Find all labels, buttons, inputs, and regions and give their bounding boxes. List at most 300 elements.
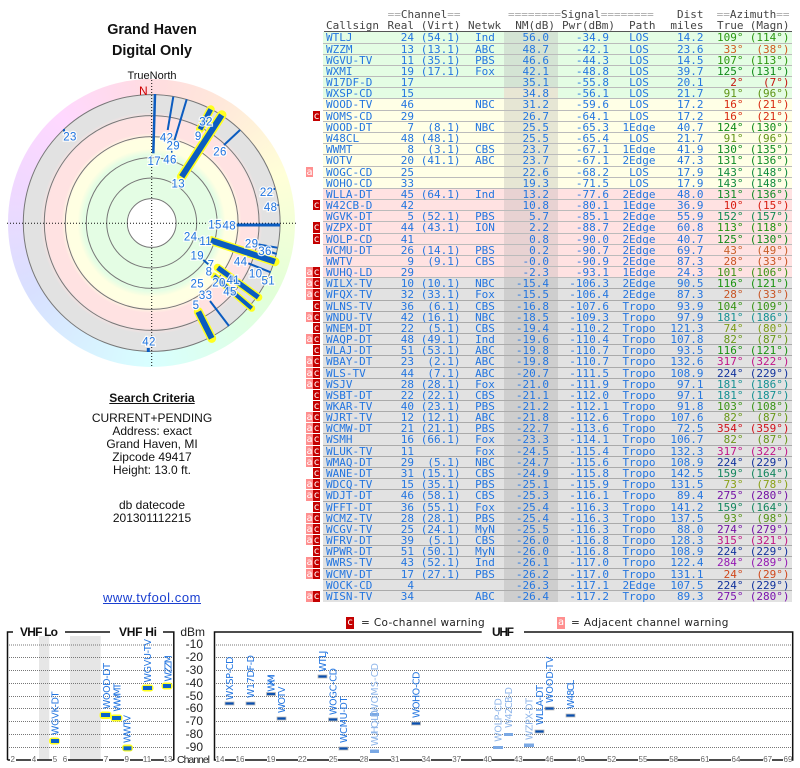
- row WJRT-TV: 12: [401, 411, 414, 424]
- row WGVK-DT: (52.1): [421, 210, 460, 223]
- row WGVU-TV: WGVU-TV: [326, 54, 372, 67]
- VHF stations: WGVU-TV: [143, 638, 154, 682]
- row WOCK-CD: 2Edge: [622, 579, 656, 592]
- row WFFT-DT: (164°): [750, 501, 790, 514]
- row WOOD-TV: 17.2: [677, 98, 704, 111]
- row WJRT-TV: WJRT-TV: [326, 411, 372, 424]
- row WCMV-DT: WCMV-DT: [326, 568, 372, 581]
- row WGVK-DT: (157°): [750, 210, 790, 223]
- UHF channel axis: 52: [607, 755, 617, 764]
- row WGVU-TV: PBS: [475, 54, 495, 67]
- row W17DF-D: 2°: [730, 76, 744, 89]
- dBm scale: -90: [186, 740, 203, 754]
- row W17DF-D: 20.1: [677, 76, 704, 89]
- row WLLA-DT: -77.6: [576, 188, 609, 201]
- table header: (Magn): [750, 19, 790, 32]
- row WANE-DT: (15.1): [421, 467, 460, 480]
- row WWMT: (135°): [750, 143, 790, 156]
- row WGVU-TV: -44.3: [576, 54, 609, 67]
- VHF stations: WWMT: [112, 683, 124, 712]
- row WOMS-CD: 17.2: [677, 110, 704, 123]
- row WFQX-TV: 2Edge: [622, 288, 656, 301]
- row WCGV-TV: 274°: [717, 523, 744, 536]
- UHF channel axis: 19: [267, 755, 276, 764]
- db datecode: db datecode: [119, 498, 185, 512]
- row WCGV-TV: -116.3: [569, 523, 609, 536]
- row WCGV-TV: MyN: [475, 523, 495, 536]
- row WLNS-TV: (109°): [750, 300, 790, 313]
- row W17DF-D: 17: [401, 76, 414, 89]
- row WFFT-DT: -25.4: [516, 501, 549, 514]
- row WUHQ-LD: 1Edge: [622, 266, 656, 279]
- row WDJT-DT: -25.3: [516, 489, 549, 502]
- row WLUK-TV: Tropo: [622, 445, 656, 458]
- station table: c: [313, 434, 320, 445]
- UHF stations: WOLP-CD: [493, 698, 504, 742]
- row WFRV-DT: [323, 535, 792, 546]
- legend: adjacent channel warning: = Adjacent channel warning: [571, 617, 729, 629]
- row WGVK-DT: 152°: [717, 210, 744, 223]
- row WCMZ-TV: -25.4: [516, 512, 549, 525]
- search criteria heading: Search Criteria: [109, 391, 195, 405]
- row WCMW-DT: Tropo: [622, 422, 656, 435]
- row WFRV-DT: (5.1): [427, 534, 460, 547]
- row WSMH: (66.1): [421, 433, 460, 446]
- row WCMU-DT: 43°: [724, 244, 744, 257]
- channel number labels: 29: [245, 238, 258, 250]
- row W42CB-D: (15°): [756, 199, 790, 212]
- row WCMZ-TV: [323, 513, 792, 524]
- row WLAJ-DT: (121°): [750, 344, 790, 357]
- VHF Hi heading: VHF Hi: [119, 625, 157, 639]
- VHF channel axis: 6: [63, 755, 68, 764]
- row WNEM-DT: [323, 323, 792, 334]
- row WCMW-DT: 354°: [717, 422, 744, 435]
- row WLUK-TV: -115.4: [569, 445, 609, 458]
- station table: c: [313, 200, 320, 211]
- website link: www.tvfool.com: [103, 590, 201, 605]
- row WXMI: 19: [401, 65, 414, 78]
- row WNEM-DT: CBS: [475, 322, 495, 335]
- row WLNS-TV: -16.8: [516, 300, 549, 313]
- row WLS-TV: -111.5: [569, 367, 609, 380]
- station table: c: [313, 591, 320, 602]
- row WWMT: 8: [407, 143, 414, 156]
- station table: c: [313, 111, 320, 122]
- row WILX-TV: NBC: [475, 277, 495, 290]
- row WCMW-DT: (359°): [750, 422, 790, 435]
- row WCGV-TV: 25: [401, 523, 414, 536]
- row WOMS-CD: [323, 111, 792, 122]
- row WFFT-DT: 141.2: [670, 501, 704, 514]
- UHF channel axis: 61: [701, 755, 710, 764]
- table header: ==Channel==: [388, 8, 460, 21]
- VHF spectrum chart: [6, 625, 210, 766]
- table header: Callsign: [326, 19, 379, 32]
- row WLLA-DT: 45: [401, 188, 414, 201]
- polar plot: [7, 80, 296, 366]
- row WOOD-TV: LOS: [629, 98, 649, 111]
- row WSBT-DT: 22: [401, 389, 414, 402]
- row WGVK-DT: 55.9: [677, 210, 704, 223]
- UHF channel axis: 58: [669, 755, 679, 764]
- row WILX-TV: WILX-TV: [326, 277, 372, 290]
- row WDCQ-TV: Tropo: [622, 478, 656, 491]
- row WNDU-TV: 42: [401, 311, 414, 324]
- row WZPX-DT: -88.7: [576, 221, 609, 234]
- row WOGC-CD: 22.6: [522, 166, 549, 179]
- row W48CL: 48: [401, 132, 414, 145]
- row WWRS-TV: 122.4: [670, 556, 704, 569]
- row WWTV: -0.0: [522, 255, 549, 268]
- row WSJV: -21.0: [516, 378, 549, 391]
- row WDCQ-TV: [323, 479, 792, 490]
- row WAQP-DT: 107.8: [670, 333, 704, 346]
- row WCMU-DT: (14.1): [421, 244, 460, 257]
- row WFFT-DT: -116.3: [569, 501, 609, 514]
- row WCMZ-TV: WCMZ-TV: [326, 512, 372, 525]
- channel number labels: 42: [160, 132, 173, 144]
- VHF channel axis: 7: [104, 755, 109, 764]
- row WILX-TV: -106.3: [569, 277, 609, 290]
- row WKAR-TV: (108°): [750, 400, 790, 413]
- row WMAQ-DT: 29: [401, 456, 414, 469]
- row WLLA-DT: 48.0: [677, 188, 704, 201]
- row WKAR-TV: WKAR-TV: [326, 400, 372, 413]
- row WAQP-DT: WAQP-DT: [326, 333, 372, 346]
- row WOGC-CD: 17.9: [677, 166, 704, 179]
- row WFRV-DT: CBS: [475, 534, 495, 547]
- row WOTV: 131°: [717, 154, 744, 167]
- row WOLP-CD: -90.0: [576, 233, 609, 246]
- row WJRT-TV: 107.6: [670, 411, 704, 424]
- row WLLA-DT: (136°): [750, 188, 790, 201]
- row WOTV: -67.1: [576, 154, 609, 167]
- row W48CL: [323, 133, 792, 144]
- row WOOD-DT: 124°: [717, 121, 744, 134]
- row WWRS-TV: (52.1): [421, 556, 460, 569]
- row WXMI: (131°): [750, 65, 790, 78]
- row WCMU-DT: WCMU-DT: [326, 244, 372, 257]
- row WTLJ: (114°): [750, 31, 790, 44]
- row WUHQ-LD: -2.3: [522, 266, 549, 279]
- dBm scale: -80: [186, 727, 203, 741]
- row WSBT-DT: WSBT-DT: [326, 389, 372, 402]
- row W17DF-D: LOS: [629, 76, 649, 89]
- table header: (Virt): [421, 19, 460, 32]
- row WSBT-DT: -112.0: [569, 389, 609, 402]
- table header: True: [717, 19, 744, 32]
- row WFRV-DT: (321°): [750, 534, 790, 547]
- dBm scale: -70: [186, 714, 203, 728]
- row WFQX-TV: 32: [401, 288, 414, 301]
- row WSBT-DT: (187°): [750, 389, 790, 402]
- row WBAY-DT: [323, 356, 792, 368]
- row WNEM-DT: 121.3: [670, 322, 704, 335]
- row WFFT-DT: 159°: [717, 501, 744, 514]
- station table: c: [313, 334, 320, 345]
- row WSMH: (87°): [756, 433, 790, 446]
- row WMAQ-DT: NBC: [475, 456, 495, 469]
- row WLUK-TV: 11: [401, 445, 414, 458]
- UHF channel axis: 55: [639, 755, 648, 764]
- row W42CB-D: W42CB-D: [326, 199, 372, 212]
- row WZZM: (38°): [756, 43, 790, 56]
- row WCMW-DT: -113.6: [569, 422, 609, 435]
- station table: [306, 8, 792, 603]
- row WOOD-TV: [323, 99, 792, 111]
- row WCMU-DT: -90.7: [576, 244, 609, 257]
- search criteria details: Grand Haven, MI: [106, 437, 198, 451]
- row WXMI: (17.1): [421, 65, 460, 78]
- row WCMU-DT: 0.2: [529, 244, 549, 257]
- row WCGV-TV: (24.1): [421, 523, 460, 536]
- row WWMT: 23.7: [522, 143, 549, 156]
- row WLLA-DT: 2Edge: [622, 188, 656, 201]
- dBm scale: -40: [186, 676, 203, 690]
- channel axis title: Channel: [177, 754, 210, 766]
- row WSBT-DT: 97.1: [677, 389, 704, 402]
- row W42CB-D: 10.8: [522, 199, 549, 212]
- UHF stations: WLLA-DT: [535, 685, 546, 725]
- row WNEM-DT: 22: [401, 322, 414, 335]
- row WZPX-DT: 113°: [717, 221, 744, 234]
- row WANE-DT: -115.8: [569, 467, 609, 480]
- row WWRS-TV: 43: [401, 556, 414, 569]
- row WNEM-DT: -19.4: [516, 322, 549, 335]
- row WOTV: (41.1): [421, 154, 460, 167]
- row WDCQ-TV: PBS: [475, 478, 495, 491]
- row WWTV: [323, 256, 792, 267]
- station table: a: [306, 535, 313, 546]
- row WOHO-CD: 33: [401, 177, 414, 190]
- row WNEM-DT: (5.1): [427, 322, 460, 335]
- dBm scale: -10: [186, 637, 203, 651]
- row WCMW-DT: WCMW-DT: [326, 422, 372, 435]
- UHF channel axis: 31: [391, 755, 400, 764]
- row WOTV: 2Edge: [622, 154, 656, 167]
- row WCMV-DT: -26.2: [516, 568, 549, 581]
- row WBAY-DT: (322°): [750, 355, 790, 368]
- row WFRV-DT: -26.0: [516, 534, 549, 547]
- row WJRT-TV: [323, 412, 792, 423]
- UHF stations: WUHQ-LD: [370, 710, 381, 746]
- row WDCQ-TV: WDCQ-TV: [326, 478, 372, 491]
- row WWMT: 130°: [717, 143, 744, 156]
- station table: c: [313, 412, 320, 423]
- row WISN-TV: WISN-TV: [326, 590, 372, 603]
- search criteria details: Height: 13.0 ft.: [113, 463, 191, 477]
- channel number labels: 29: [167, 140, 180, 152]
- row WOOD-TV: 31.2: [522, 98, 549, 111]
- row WLNS-TV: [323, 301, 792, 312]
- row WKAR-TV: 91.8: [677, 400, 704, 413]
- row W42CB-D: [323, 200, 792, 211]
- dBm scale: -30: [186, 663, 203, 677]
- row WNEM-DT: (80°): [756, 322, 790, 335]
- row W48CL: 25.5: [522, 132, 549, 145]
- row WOHO-CD: 143°: [717, 177, 744, 190]
- table header: ==Azimuth==: [717, 8, 790, 21]
- table header: NM(dB): [515, 19, 555, 32]
- row WOMS-CD: -64.1: [576, 110, 609, 123]
- row WDCQ-TV: 15: [401, 478, 414, 491]
- UHF channel axis: 46: [545, 755, 554, 764]
- row WCMU-DT: PBS: [475, 244, 495, 257]
- row WFQX-TV: 87.3: [677, 288, 704, 301]
- row WWRS-TV: -117.0: [569, 556, 609, 569]
- row WSJV: (186°): [750, 378, 790, 391]
- row WXMI: [323, 66, 792, 77]
- row WOLP-CD: 0.8: [529, 233, 549, 246]
- station table: c: [313, 289, 320, 300]
- row WLLA-DT: Ind: [475, 188, 495, 201]
- row WOOD-DT: 7: [407, 121, 414, 134]
- row WOHO-CD: 17.9: [677, 177, 704, 190]
- row WSJV: Tropo: [622, 378, 656, 391]
- row WMAQ-DT: [323, 457, 792, 468]
- row WPWR-DT: 108.9: [670, 545, 704, 558]
- UHF stations: WTLJ: [318, 651, 329, 672]
- row W17DF-D: [323, 77, 792, 88]
- row WXSP-CD: -56.1: [576, 87, 609, 100]
- row WMAQ-DT: (5.1): [427, 456, 460, 469]
- station table: c: [313, 513, 320, 524]
- row WANE-DT: [323, 468, 792, 479]
- station table: a: [306, 446, 313, 457]
- row WOOD-DT: -65.3: [576, 121, 609, 134]
- row WCMZ-TV: (98°): [756, 512, 790, 525]
- UHF stations: W42CB-D: [504, 687, 515, 728]
- UHF channel axis: 40: [483, 755, 493, 764]
- row WFQX-TV: -15.5: [516, 288, 549, 301]
- row WZZM: [323, 44, 792, 55]
- row WXMI: -48.8: [576, 65, 609, 78]
- channel number labels: 15: [208, 219, 222, 231]
- dBm scale: -60: [186, 701, 203, 715]
- row WOLP-CD: 2Edge: [622, 233, 656, 246]
- row WWMT: 1Edge: [622, 143, 656, 156]
- row WPWR-DT: -116.8: [569, 545, 609, 558]
- row WZPX-DT: 2.2: [529, 221, 549, 234]
- row WOCK-CD: WOCK-CD: [326, 579, 372, 592]
- station table: c: [313, 312, 320, 323]
- row WAQP-DT: (87°): [756, 333, 790, 346]
- row WOHO-CD: [323, 178, 792, 189]
- row WGVK-DT: -85.1: [576, 210, 609, 223]
- legend: co-channel warning: c: [347, 617, 353, 628]
- row WLNS-TV: Tropo: [622, 300, 656, 313]
- row WDJT-DT: (280°): [750, 489, 790, 502]
- row WLS-TV: (229°): [750, 367, 790, 380]
- row WLAJ-DT: -19.8: [516, 344, 549, 357]
- row WOLP-CD: 40.7: [677, 233, 704, 246]
- channel number labels: 23: [63, 132, 77, 144]
- station table: c: [313, 301, 320, 312]
- row WILX-TV: [323, 278, 792, 289]
- row WOCK-CD: (229°): [750, 579, 790, 592]
- row WSJV: -111.9: [569, 378, 609, 391]
- row WBAY-DT: 23: [401, 355, 414, 368]
- station table: a: [306, 457, 313, 468]
- row WLAJ-DT: [323, 345, 792, 356]
- row WMAQ-DT: (229°): [750, 456, 790, 469]
- row WWMT: (3.1): [427, 143, 460, 156]
- row WSBT-DT: Tropo: [622, 389, 656, 402]
- row WZPX-DT: (118°): [750, 221, 790, 234]
- row WOGC-CD: -68.2: [576, 166, 609, 179]
- row WOOD-TV: WOOD-TV: [326, 98, 372, 111]
- row WTLJ: LOS: [629, 31, 649, 44]
- row WSMH: 16: [401, 433, 414, 446]
- row WWTV: (33°): [756, 255, 790, 268]
- row WLUK-TV: -24.5: [516, 445, 549, 458]
- row WWRS-TV: [323, 557, 792, 569]
- row WLS-TV: Tropo: [622, 367, 656, 380]
- row WLNS-TV: 104°: [717, 300, 744, 313]
- row WBAY-DT: ABC: [475, 355, 495, 368]
- row W17DF-D: 35.1: [522, 76, 549, 89]
- row WNDU-TV: -109.3: [569, 311, 609, 324]
- row WFFT-DT: (55.1): [421, 501, 460, 514]
- row WFQX-TV: -106.4: [569, 288, 609, 301]
- row WGVU-TV: (113°): [750, 54, 790, 67]
- row WOGC-CD: WOGC-CD: [326, 166, 372, 179]
- row WGVK-DT: 5: [407, 210, 414, 223]
- db datecode: [113, 498, 191, 525]
- row WISN-TV: (280°): [750, 590, 790, 603]
- channel number labels: 33: [199, 290, 212, 302]
- channel number labels: 46: [163, 154, 177, 166]
- row WGVU-TV: (35.1): [421, 54, 460, 67]
- row WJRT-TV: -112.6: [569, 411, 609, 424]
- row WLUK-TV: 317°: [717, 445, 744, 458]
- UHF channel axis: 49: [576, 755, 586, 764]
- row WANE-DT: (164°): [750, 467, 790, 480]
- row WDCQ-TV: 73°: [724, 478, 744, 491]
- row WDCQ-TV: (78°): [756, 478, 790, 491]
- row WOOD-DT: NBC: [475, 121, 495, 134]
- row WMAQ-DT: 224°: [717, 456, 744, 469]
- row WDJT-DT: WDJT-DT: [326, 489, 372, 502]
- row WOCK-CD: -26.3: [516, 579, 549, 592]
- UHF stations: WXMI: [267, 674, 278, 692]
- row WJRT-TV: 82°: [724, 411, 744, 424]
- row WSMH: Tropo: [622, 433, 656, 446]
- row WSMH: -114.1: [569, 433, 609, 446]
- row WOMS-CD: (21°): [756, 110, 790, 123]
- row WXMI: 42.1: [522, 65, 549, 78]
- station table: c: [313, 502, 320, 513]
- row WOOD-TV: NBC: [475, 98, 495, 111]
- row WLS-TV: (7.1): [427, 367, 460, 380]
- row WISN-TV: 89.3: [677, 590, 704, 603]
- row WDJT-DT: [323, 490, 792, 502]
- row WSBT-DT: -21.1: [516, 389, 549, 402]
- station table: a: [306, 278, 313, 289]
- row WNDU-TV: (186°): [750, 311, 790, 324]
- row WXMI: 39.7: [677, 65, 704, 78]
- row WKAR-TV: -112.1: [569, 400, 609, 413]
- row WANE-DT: CBS: [475, 467, 495, 480]
- row WANE-DT: WANE-DT: [326, 467, 372, 480]
- row WOOD-TV: (21°): [756, 98, 790, 111]
- row WOTV: 20: [401, 154, 414, 167]
- UHF channel axis: 37: [452, 755, 462, 764]
- row WNDU-TV: NBC: [475, 311, 495, 324]
- station table: a: [306, 267, 313, 278]
- channel number labels: 13: [172, 178, 185, 190]
